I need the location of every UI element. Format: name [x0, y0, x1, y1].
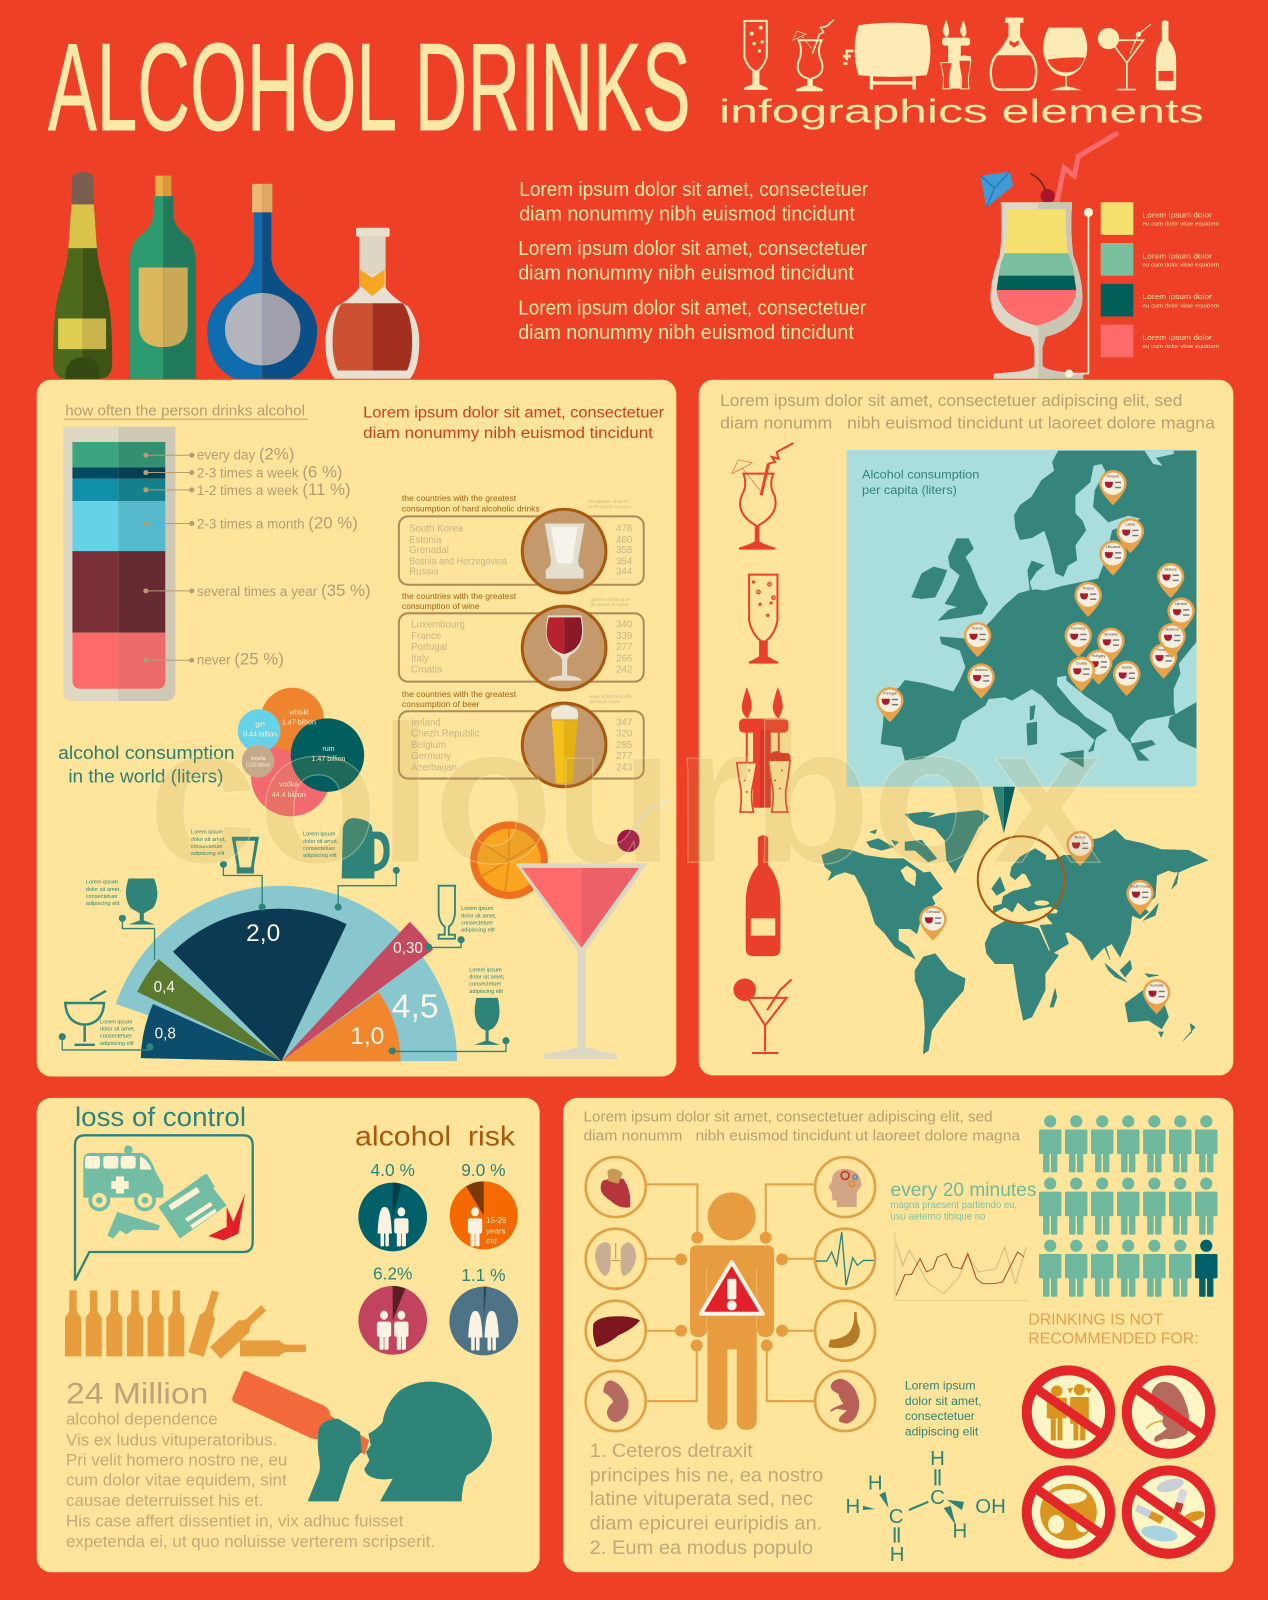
- icon: heart: [601, 1169, 630, 1208]
- icon: martini: [1098, 24, 1151, 90]
- table: beer: Ireland: [411, 718, 441, 729]
- table: hard alcoholic drinks: Grenadal: [409, 545, 449, 556]
- captions: adipiscing elit: [100, 1041, 134, 1047]
- icon: kidney: [603, 1380, 629, 1422]
- text: ceteros: latine vituperata sed, nec: [590, 1488, 813, 1510]
- glass bar chart: [63, 427, 175, 701]
- pins: Moldova: [1165, 628, 1179, 632]
- highlight ring: [978, 836, 1064, 923]
- legend: green: eu cum dolor vitae equidem: [1143, 262, 1219, 268]
- captions: adipiscing elit: [86, 901, 120, 907]
- captions: dolor sit amet,: [86, 887, 121, 893]
- bottle: blue round: [207, 184, 317, 379]
- molecule: H: [890, 1544, 904, 1566]
- map: world: [822, 810, 1208, 1054]
- table: wine: Luxembourg: [411, 620, 465, 631]
- bubble chart: 1.47 billion: [282, 719, 316, 727]
- icon: fetus: [830, 1379, 859, 1424]
- bubble chart: [238, 688, 364, 816]
- table: hard alcoholic drinks: on the person in a year: [588, 504, 632, 509]
- icon: ambulance: [83, 1145, 163, 1211]
- captions: Lorem ipsum: [303, 832, 336, 838]
- heading: drinking is not recommended: [1028, 1311, 1199, 1348]
- pins: Poland: [1083, 586, 1094, 590]
- icon: cherry and straw: [617, 801, 669, 852]
- table: wine: glasses of 200 ml on: [591, 597, 630, 602]
- frequency labels: 1-2 times a week (11 %): [197, 480, 351, 499]
- table: beer: 347: [616, 718, 632, 729]
- risk: 9.0 %: old: [486, 1236, 497, 1245]
- bubble chart: 0.23 billion: [246, 762, 270, 768]
- icon: head with gears: [828, 1169, 862, 1207]
- text: every 20 minutes: magna praesent partiendo eu,: [891, 1200, 1017, 1211]
- table: wine: 340: [616, 620, 633, 631]
- text: ceteros: 1. Ceteros detraxit: [590, 1440, 753, 1462]
- fan icons: [65, 818, 505, 1047]
- icon: decanter: [991, 18, 1036, 90]
- arrow pointer: [993, 787, 1015, 834]
- pins: Romania: [1156, 648, 1171, 652]
- title: ALCOHOL DRINKS: [48, 18, 691, 157]
- icon: flute: [439, 886, 455, 939]
- table: wine: France: [411, 631, 441, 642]
- layered cocktail with legend: [980, 133, 1219, 379]
- table: beer: mugs of 300 ml on the: [590, 694, 632, 699]
- table: beer: person in a year: [590, 699, 621, 704]
- frequency labels: [143, 444, 371, 668]
- risk: 9.0 %: 15-29: [486, 1216, 507, 1225]
- icon: cherry: [1030, 174, 1055, 203]
- text: lorem green: Lorem ipsum: [905, 1379, 976, 1393]
- bottles: [53, 172, 419, 379]
- panel: drinking frequency and consumption: [37, 380, 676, 1076]
- icon: wine snifter: [1043, 28, 1087, 90]
- icon: martini: [734, 980, 792, 1053]
- martini illustration: [470, 801, 669, 1059]
- text: 24 Million: expetenda ei, ut quo noluisse verterem scripserit.: [66, 1532, 435, 1551]
- figure with warning: [690, 1192, 774, 1430]
- captions: dolor sit amet,: [191, 837, 226, 843]
- captions: Lorem ipsum: [100, 1019, 133, 1025]
- heading: red lorem: diam nonummy nibh euismod tincidunt: [363, 425, 654, 442]
- body diagram: [586, 1157, 875, 1431]
- heading: drinking is not recommended: RECOMMENDED FOR:: [1028, 1331, 1199, 1348]
- intro text: Lorem ipsum dolor sit amet, consectetuer: [519, 179, 868, 201]
- pins: Portugal: [883, 692, 897, 696]
- pins: [876, 470, 1195, 722]
- captions: dolor sit amet,: [100, 1027, 136, 1033]
- text: 24 Million: Pri velit homero nostro ne, eu: [66, 1450, 287, 1469]
- pins: Slovakia: [1104, 632, 1118, 636]
- icon: person drinking: [232, 1371, 492, 1501]
- captions: consectetuer: [191, 844, 223, 850]
- table: hard alcoholic drinks: the countries with the greatest: [402, 493, 517, 503]
- pins: South Korea: [1130, 885, 1150, 889]
- molecule: C: [930, 1487, 945, 1509]
- table: wine: the person in a year: [591, 602, 629, 607]
- table: hard alcoholic drinks: consumption of hard alcoholic drinks: [402, 503, 540, 513]
- icon: liver: [593, 1316, 640, 1347]
- bottle: decanter: [325, 228, 419, 379]
- frequency labels: never (25 %): [197, 649, 284, 668]
- pins: Finland: [1107, 475, 1119, 479]
- frequency labels: every day (2%): [197, 444, 294, 463]
- table: beer: [399, 689, 644, 787]
- heading: frequency: how often the person drinks alcohol: [65, 403, 305, 419]
- molecule: C: [889, 1506, 904, 1528]
- panel: map of consumption: [699, 380, 1233, 1075]
- heading: world consumption: in the world (liters): [68, 766, 223, 787]
- captions: adipiscing elit: [191, 851, 225, 857]
- risk: 9.0 %: years: [486, 1226, 506, 1235]
- icon: champagne bottle: [746, 835, 780, 956]
- subtitle: infographics elements: [719, 94, 1204, 131]
- icon: cocktail glass: [793, 20, 834, 90]
- legend: dark teal: eu cum dolor vitae equidem: [1143, 303, 1219, 309]
- icon: umbrella: [980, 172, 1013, 207]
- bubble chart: gin: [255, 721, 265, 729]
- text: lorem: diam nonumm nibh euismod tincidunt ut laoreet dolore magna: [584, 1129, 1021, 1145]
- text: every 20 minutes: every 20 minutes: [891, 1179, 1036, 1201]
- icon: stomach: [828, 1312, 860, 1348]
- captions: dolor sit amet,: [469, 975, 505, 981]
- legend: pink: eu cum dolor vitae equidem: [1143, 344, 1219, 350]
- people grid: [1039, 1115, 1218, 1297]
- risk: 9.0 %: 9.0 %: [461, 1160, 506, 1180]
- captions: consectetuer: [461, 920, 493, 926]
- icon: barrel: [843, 23, 930, 90]
- text: every 20 minutes: usu aeterno tibique no: [891, 1211, 985, 1222]
- risk: 4.0 %: [358, 1160, 427, 1251]
- speech bubble: [75, 1135, 253, 1280]
- intro text: diam nonummy nibh euismod tincidunt: [519, 204, 855, 226]
- text: ceteros: principes his ne, ea nostro: [590, 1464, 823, 1486]
- captions: consectetuer: [303, 846, 335, 852]
- legend: pink: Lorem ipsum dolor: [1143, 333, 1212, 342]
- table: beer: Germany: [411, 751, 451, 762]
- prohibition icons: [1027, 1370, 1210, 1554]
- pins: France: [972, 627, 983, 631]
- panel: loss of control and risk: [37, 1098, 540, 1572]
- legend connector: [1065, 208, 1093, 378]
- icon: explosion: [208, 1194, 245, 1240]
- table: beer: consumption of beer: [402, 699, 480, 709]
- fan chart: 2,0: [246, 920, 280, 947]
- fan chart: 0,8: [155, 1026, 176, 1043]
- table: beer: Azerbaijan: [411, 762, 457, 773]
- captions: dolor sit amet,: [461, 913, 497, 919]
- icon: champagne flute: [744, 21, 767, 89]
- pins: Russia: [1075, 835, 1086, 839]
- captions: Lorem ipsum: [461, 906, 494, 912]
- bottle: champagne: [53, 172, 112, 379]
- text: lorem: [584, 1109, 1021, 1145]
- intro text: diam nonummy nibh euismod tincidunt: [518, 322, 854, 344]
- table: hard alcoholic drinks: Bosnia and Herzegovina: [409, 556, 508, 567]
- text: lorem green: consectetuer: [905, 1409, 975, 1423]
- bubble chart: whiski: [288, 708, 309, 716]
- molecule: H: [930, 1448, 945, 1470]
- captions: consectetuer: [86, 894, 118, 900]
- table: beer: the countries with the greatest: [402, 689, 517, 699]
- icon column: [732, 443, 793, 812]
- risk: 6.2%: 6.2%: [373, 1263, 412, 1283]
- captions: Lorem ipsum: [86, 880, 118, 886]
- text: lorem: Lorem ipsum dolor sit amet, consectetuer adipiscing elit, sed: [720, 392, 1182, 410]
- pins: Croatia: [1076, 661, 1087, 665]
- map: Europe: per capita (liters): [862, 483, 957, 497]
- legend: yellow: eu cum dolor vitae equidem: [1143, 222, 1219, 228]
- captions: adipiscing elit: [469, 989, 503, 995]
- captions: adipiscing elit: [303, 853, 337, 859]
- table: hard alcoholic drinks: Estonia: [409, 535, 442, 546]
- table: wine: 266: [616, 653, 632, 664]
- legend: dark teal: Lorem ipsum dolor: [1143, 292, 1212, 301]
- fan chart: 4,5: [392, 988, 439, 1025]
- heading: alcohol risk: alcohol risk: [355, 1120, 516, 1151]
- map: Europe: Alcohol consumption: [862, 468, 979, 482]
- frequency labels: 2-3 times a week (6 %): [197, 463, 343, 482]
- table: wine: 339: [616, 631, 632, 642]
- icon: no children: [1027, 1370, 1110, 1454]
- table: wine: 242: [616, 664, 632, 675]
- intro text: diam nonummy nibh euismod tincidunt: [518, 263, 854, 285]
- legend: green: Lorem ipsum dolor: [1143, 251, 1212, 260]
- icon: straw: [1057, 133, 1118, 202]
- pins: [919, 831, 1170, 1014]
- text: ceteros: diam epicurei euripidis an.: [590, 1512, 822, 1534]
- pins: Ukraine: [1175, 602, 1187, 606]
- table: beer: 285: [616, 740, 632, 751]
- legend: yellow: [1101, 202, 1219, 235]
- text: lorem green: [905, 1379, 982, 1439]
- table: wine: Portugal: [411, 642, 447, 653]
- fan chart: 0,30: [393, 940, 423, 957]
- risk: 4.0 %: 4.0 %: [371, 1160, 415, 1180]
- table: hard alcoholic drinks: 354: [616, 556, 633, 567]
- icon: warning triangle: [701, 1262, 763, 1314]
- organ circles: [586, 1157, 875, 1431]
- captions: Lorem ipsum: [191, 830, 224, 836]
- icon: gun: [107, 1212, 160, 1239]
- icon row: drinks: [744, 18, 1176, 90]
- text: 24 Million: Vis ex ludus vituperatoribus.: [66, 1430, 277, 1449]
- table: hard alcoholic drinks: [399, 493, 644, 593]
- table: beer: 243: [616, 762, 632, 773]
- fan connectors: [59, 861, 510, 1055]
- table: beer: Chezh Republic: [411, 729, 480, 740]
- pins: Grenada: [926, 910, 940, 914]
- icon: ecg: [816, 1232, 874, 1285]
- pins: Latvia: [1126, 523, 1135, 527]
- legend: green: [1101, 243, 1219, 276]
- legend: pink: [1101, 325, 1219, 357]
- table: beer: Belgium: [411, 740, 446, 751]
- frequency labels: 2-3 times a month (20 %): [197, 514, 358, 533]
- bubble chart: 1.47 billion: [311, 755, 346, 763]
- icon: flute: [749, 575, 778, 663]
- icon: cocktail glass: [65, 991, 106, 1045]
- molecule: [845, 1448, 1006, 1566]
- table: hard alcoholic drinks: 358: [616, 545, 632, 556]
- text: 24 Million: alcohol dependence: [66, 1410, 218, 1429]
- pins: Serbia: [1122, 665, 1132, 669]
- table: wine: consumption of wine: [402, 601, 480, 611]
- heading: drinking is not recommended: DRINKING IS NOT: [1028, 1311, 1163, 1328]
- fan chart: 0,4: [154, 979, 175, 996]
- icon: cocktail: [732, 443, 793, 549]
- watermark: colourbox: [148, 684, 1102, 904]
- text: 24 Million: 24 Million: [66, 1378, 208, 1411]
- captions: consectetuer: [469, 982, 502, 988]
- icon: orange slice: [470, 821, 548, 899]
- captions: consectetuer: [100, 1034, 132, 1040]
- table: wine: Italy: [411, 653, 429, 664]
- pins: Germany: [1071, 627, 1086, 631]
- legend: dark teal: [1101, 284, 1219, 316]
- table: wine: [399, 591, 644, 690]
- bubble chart: 0.44 billion: [243, 731, 277, 739]
- icon: goblet: [474, 998, 500, 1045]
- icon: snifter: [126, 879, 157, 924]
- intro text: Lorem ipsum dolor sit amet, consectetuer: [518, 238, 867, 260]
- table: hard alcoholic drinks: Russia: [409, 567, 439, 578]
- bubble chart: vodka: [279, 781, 298, 789]
- heading: loss of control: loss of control: [75, 1102, 246, 1132]
- intro text: Lorem ipsum dolor sit amet, consectetuer: [518, 297, 866, 319]
- captions: Lorem ipsum: [469, 967, 502, 973]
- heading: red lorem: Lorem ipsum dolor sit amet, consectetuer: [363, 404, 664, 421]
- text: 24 Million: [66, 1378, 435, 1551]
- icon: lungs: [595, 1242, 636, 1276]
- table: wine: 277: [616, 642, 632, 653]
- captions: [86, 830, 505, 1047]
- risk: 9.0 %: [450, 1160, 518, 1249]
- table: wine: the countries with the greatest: [402, 591, 517, 601]
- risk: 6.2%: [358, 1263, 427, 1355]
- table: beer: 277: [616, 751, 632, 762]
- molecule: H: [953, 1521, 967, 1543]
- fan chart: [116, 886, 457, 1061]
- pins: Hungary: [1092, 654, 1106, 658]
- risk: 1.1 %: 1.1 %: [461, 1265, 506, 1285]
- icon: bottle: [1156, 20, 1176, 90]
- frequency labels: several times a year (35 %): [197, 581, 371, 600]
- pins: Australia: [1150, 984, 1164, 988]
- connectors: [647, 1184, 815, 1401]
- table: hard alcoholic drinks: 478: [616, 524, 632, 535]
- text: 24 Million: His case affert dissentiet in, vix adhuc fuisset: [66, 1511, 404, 1530]
- bottle: green: [130, 176, 196, 379]
- risk: 1.1 %: [449, 1265, 518, 1355]
- pins: Belarus: [1165, 567, 1177, 571]
- text: lorem: Lorem ipsum dolor sit amet, consectetuer adipiscing elit, sed: [584, 1109, 993, 1125]
- heading: world consumption: alcohol consumption: [58, 742, 235, 763]
- text: ceteros: 2. Eum ea modus populo: [590, 1537, 813, 1559]
- table: hard alcoholic drinks: 344: [616, 567, 633, 578]
- heading: red lorem: [363, 404, 664, 442]
- text: 24 Million: cum dolor vitae equidem, sint: [66, 1471, 287, 1490]
- text: lorem green: adipiscing elit: [905, 1425, 979, 1439]
- heading: world consumption: [58, 742, 235, 787]
- icon: no medication: [1127, 1470, 1210, 1554]
- bubble chart: rum: [322, 745, 335, 753]
- icon: no pregnancy: [1127, 1370, 1210, 1454]
- captions: dolor sit amet,: [303, 839, 339, 845]
- table: wine: Croatia: [411, 664, 443, 675]
- glass: [990, 202, 1083, 379]
- pins: Andorra: [975, 668, 987, 672]
- text: 24 Million: causae deterruisset his et.: [66, 1491, 263, 1510]
- pins: Lithuania: [1106, 545, 1120, 549]
- panel: health effects: [563, 1098, 1233, 1572]
- icon: beer tap: [737, 687, 790, 812]
- bubble chart: 44.4 billion: [272, 791, 306, 799]
- captions: adipiscing elit: [461, 928, 495, 934]
- icon: crashed car: [158, 1174, 227, 1239]
- fan chart: 1,0: [350, 1023, 384, 1050]
- table: beer: 320: [616, 729, 633, 740]
- text: lorem green: dolor sit amet,: [905, 1394, 982, 1408]
- text: every 20 minutes: [891, 1179, 1036, 1222]
- molecule: OH: [975, 1496, 1006, 1518]
- intro text: [518, 179, 868, 344]
- text: ceteros: [590, 1440, 823, 1559]
- icon: row of bottles: [65, 1289, 306, 1359]
- text: lorem: [720, 392, 1216, 433]
- table: hard alcoholic drinks: shot glasses of 50 ml: [588, 499, 628, 504]
- icon: beer mug: [342, 818, 390, 879]
- text: lorem: diam nonumm nibh euismod tincidunt ut laoreet dolore magna: [720, 415, 1216, 433]
- molecule: H: [868, 1473, 883, 1495]
- table: hard alcoholic drinks: South Korea: [409, 524, 464, 535]
- table: hard alcoholic drinks: 460: [616, 535, 633, 546]
- icon: shot glass: [232, 837, 259, 873]
- map: Europe: [847, 450, 1197, 787]
- legend: yellow: Lorem ipsum dolor: [1143, 211, 1212, 220]
- icon: beer tap: [941, 20, 971, 89]
- molecule: H: [845, 1496, 860, 1518]
- line chart: [895, 1232, 1028, 1300]
- bubble chart: tequila: [251, 756, 266, 762]
- icon: no driving: [1027, 1470, 1110, 1554]
